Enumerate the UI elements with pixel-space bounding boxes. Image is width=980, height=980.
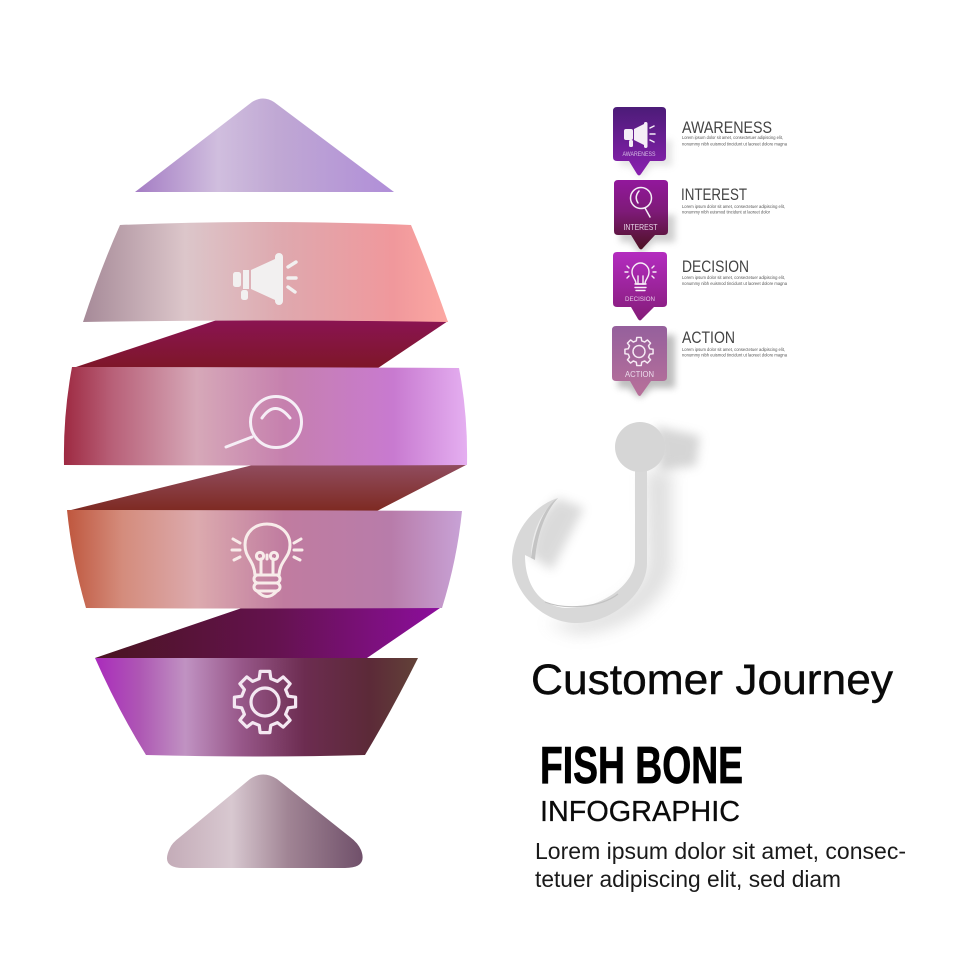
body text: tetuer adipiscing elit, sed diam: [535, 866, 841, 892]
heading and text: ACTION: [682, 329, 735, 347]
heading and text: [682, 119, 787, 146]
heading and text: [681, 186, 785, 214]
band 1: awareness: [73, 222, 448, 368]
icon: fish hook: [512, 422, 700, 634]
heading and text: Lorem ipsum dolor sit amet, consectetuer adipiscing elit,: [682, 275, 785, 280]
panel: legend: [612, 107, 787, 398]
band 2: interest: [64, 367, 467, 511]
icon: small megaphone: [624, 122, 655, 148]
band 3: decision: [67, 510, 462, 658]
heading and text: [682, 329, 787, 358]
icon: light bulb: [232, 524, 302, 596]
band 4: action: [95, 658, 418, 756]
heading and text: [682, 258, 787, 286]
heading and text: nonummy nibh euismod tincidunt ut laoreet dolore magna: [682, 352, 787, 358]
fish tail triangle: [167, 774, 363, 868]
title: customer journey: Customer Journey: [531, 656, 894, 704]
body text: [535, 838, 906, 892]
legend item: action: [612, 326, 787, 398]
subheading: infographic: INFOGRAPHIC: [540, 796, 740, 828]
heading and text: DECISION: [682, 258, 749, 276]
heading and text: Lorem ipsum dolor sit amet, consectetuer adipiscing elit,: [682, 204, 785, 209]
heading and text: Lorem ipsum dolor sit amet, consectetuer adipiscing elit,: [682, 135, 783, 140]
heading and text: nonummy nibh euismod tincidunt ut laoreet dolor: [682, 210, 770, 214]
fish head triangle: [135, 98, 394, 192]
heading: fish bone: FISH BONE: [540, 737, 743, 795]
heading and text: INTEREST: [681, 186, 747, 204]
icon: small gear: [625, 337, 653, 366]
legend item: interest: [614, 180, 785, 254]
legend item: decision: [613, 252, 787, 320]
legend item: action: ACTION: [625, 370, 654, 379]
heading and text: nonummy nibh euismod tincidunt ut laoreet dolore magna: [682, 281, 787, 286]
heading and text: nonummy nibh euismod tincidunt ut laoreet dolore magna: [682, 142, 787, 146]
panel: fish body: [64, 98, 467, 868]
icon: megaphone: [233, 253, 296, 305]
icon: magnifying glass: [226, 396, 302, 448]
icon: small magnifying glass: [630, 188, 652, 217]
legend item: interest: INTEREST: [624, 223, 658, 232]
legend item: awareness: [613, 107, 787, 178]
icon: small light bulb: [625, 263, 656, 290]
icon: gear: [234, 671, 296, 733]
legend item: awareness: AWARENESS: [622, 151, 656, 158]
heading and text: Lorem ipsum dolor sit amet, consectetuer adipiscing elit,: [682, 347, 785, 352]
legend item: decision: DECISION: [625, 296, 655, 303]
heading and text: AWARENESS: [682, 119, 772, 137]
body text: Lorem ipsum dolor sit amet, consec-: [535, 838, 906, 864]
